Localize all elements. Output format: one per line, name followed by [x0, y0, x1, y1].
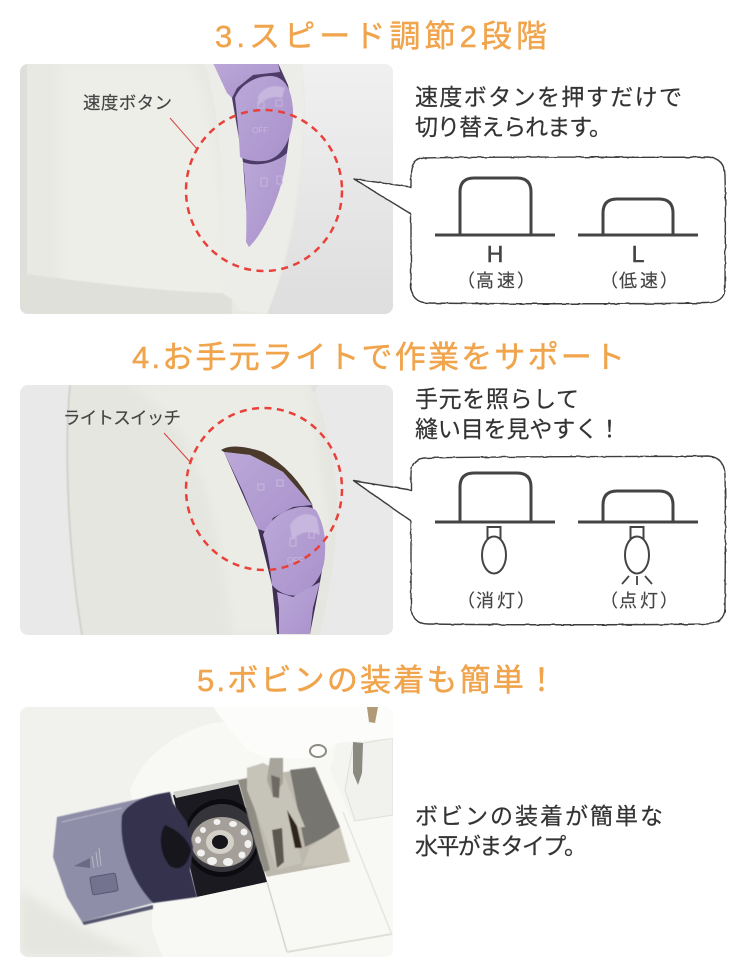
- title: work light: 4.お手元ライトで作業をサポート: [132, 340, 625, 375]
- bobbin: [191, 817, 253, 867]
- white disc and bed: [130, 707, 393, 957]
- front plate: [197, 862, 350, 897]
- text: speed description: [415, 84, 682, 140]
- text: light description: 手元を照らして: [415, 386, 579, 412]
- photo: bobbin: [20, 707, 393, 957]
- callout bubble: [354, 456, 725, 625]
- diagram: L: L: [632, 241, 645, 267]
- label: light switch: [63, 408, 191, 463]
- text: bobbin description: 水平がまタイプ。: [415, 833, 587, 859]
- title: bobbin: 5.ボビンの装着も簡単！: [197, 663, 557, 698]
- callout: light off and on: [354, 456, 725, 625]
- photo: speed button: [20, 63, 393, 314]
- text: light description: 縫い目を見やすく！: [415, 416, 621, 442]
- diagram: L: [578, 199, 698, 291]
- highlight circle: light switch: [186, 408, 342, 570]
- label: light switch: ライトスイッチ: [63, 408, 181, 428]
- photo: speed button: OFF: [252, 126, 268, 135]
- diagram: H: [435, 178, 555, 291]
- highlight circle: speed button: [186, 110, 342, 271]
- cover arrow and window: [74, 848, 118, 895]
- photo: light switch: [20, 385, 393, 635]
- diagram: light on: [578, 491, 698, 611]
- diagram: light off: [435, 473, 555, 611]
- callout: speed H and L: [354, 157, 725, 304]
- label: speed button: 速度ボタン: [83, 93, 172, 113]
- diagram: light off: （消灯）: [457, 591, 535, 611]
- callout bubble: [354, 157, 725, 304]
- title: speed control: 3.スピード調節2段階: [215, 19, 547, 54]
- text: light description: [415, 386, 621, 442]
- text: speed description: 切り替えられます。: [415, 114, 612, 140]
- diagram: light on: （点灯）: [600, 591, 678, 611]
- label: speed button: [83, 93, 197, 149]
- text: bobbin description: [415, 803, 663, 859]
- text: bobbin description: ボビンの装着が簡単な: [415, 803, 663, 829]
- diagram: L: （低速）: [600, 271, 678, 291]
- diagram: H: （高速）: [457, 271, 535, 291]
- text: speed description: 速度ボタンを押すだけで: [415, 84, 682, 110]
- bobbin cavity: [173, 782, 267, 897]
- transparent cover: [53, 792, 197, 925]
- diagram: H: H: [487, 241, 503, 267]
- presser foot and needle plate: [238, 758, 350, 877]
- photo: light switch: OFF: [287, 556, 303, 565]
